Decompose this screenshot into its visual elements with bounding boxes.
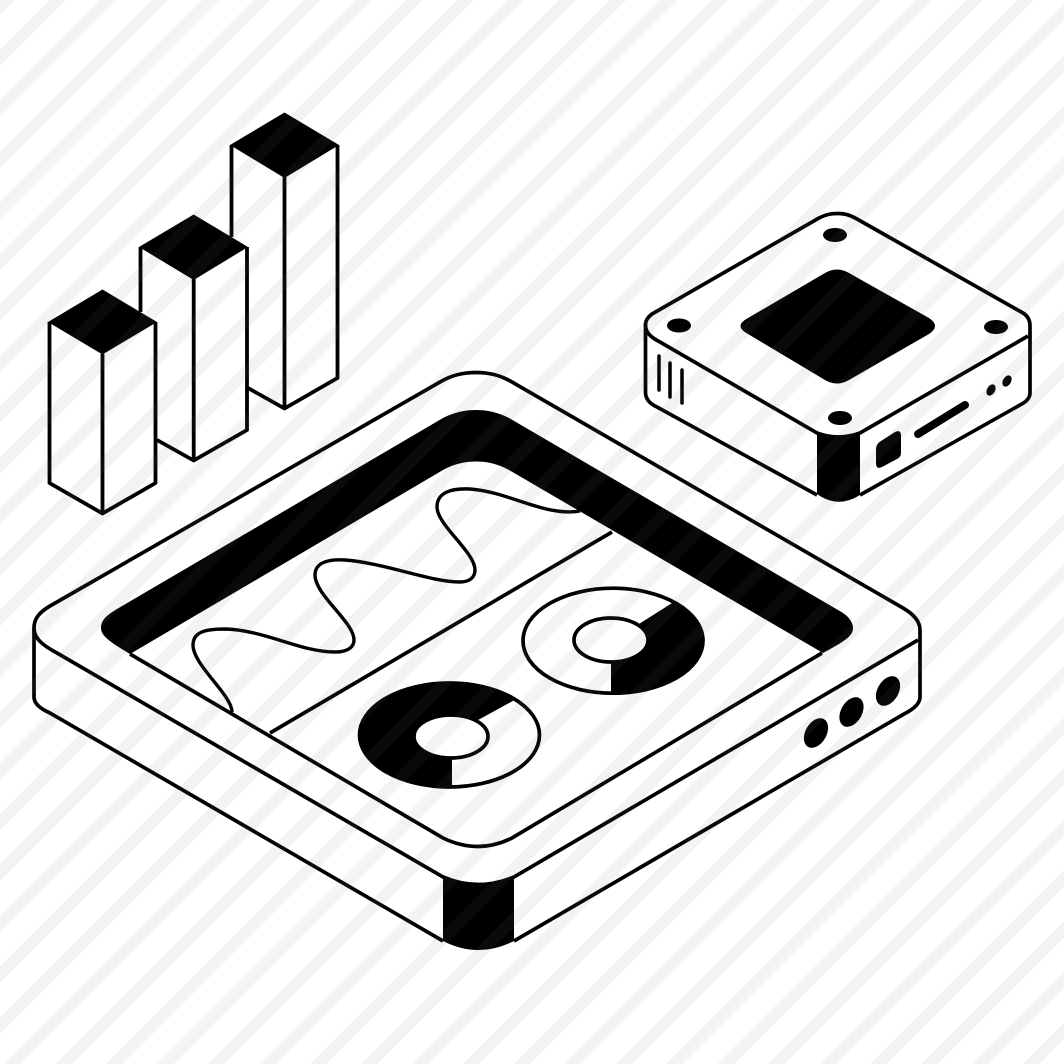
tablet top outline (34, 372, 920, 884)
donut chart left (359, 683, 540, 788)
donut chart right (523, 588, 703, 694)
line chart wave (193, 489, 580, 712)
device top outline (646, 214, 1030, 437)
bar 3 (230, 112, 339, 408)
square port (876, 431, 901, 468)
front corner strip (817, 433, 860, 502)
vents (659, 356, 682, 403)
mini PC device (646, 214, 1030, 502)
screen divider (270, 532, 612, 733)
bar 2 (139, 214, 248, 460)
main tablet device (34, 372, 920, 950)
center black panel (740, 270, 935, 384)
device side outline (646, 325, 1030, 495)
card slot (918, 405, 965, 434)
side buttons (799, 672, 905, 752)
bar chart (48, 112, 339, 514)
front corner strip (443, 877, 514, 950)
tablet side outline (34, 628, 920, 941)
screen lower edge (130, 653, 822, 846)
screw holes (667, 228, 1008, 425)
indicator dots (985, 374, 1013, 397)
bar 1 (48, 290, 157, 514)
screen black bezel (101, 410, 853, 654)
